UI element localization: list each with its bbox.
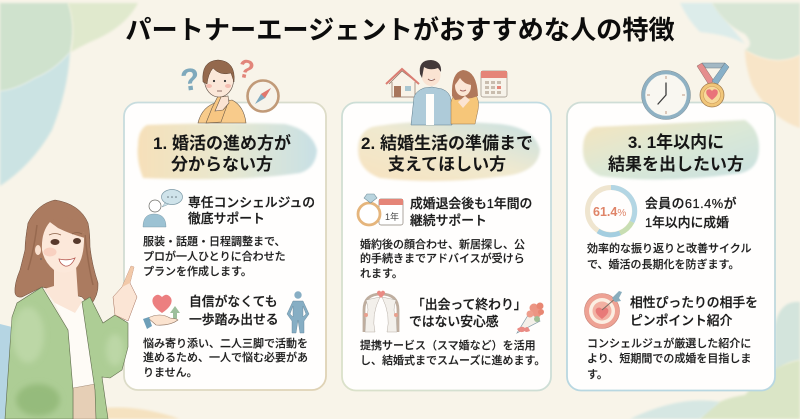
text: 一歩踏み出せる <box>189 312 279 327</box>
text: 継続サポート <box>410 213 487 228</box>
feature 1 title: 専任コンシェルジュの <box>188 195 315 210</box>
heading 3: 3. 1年以内に <box>628 133 724 152</box>
text: りません。 <box>143 367 198 379</box>
text: 結果を出したい方 <box>608 155 744 174</box>
illustration: thinking man with question marks and compass: ? <box>178 61 202 98</box>
feature 6 title: 相性ぴったりの相手を <box>630 295 758 310</box>
feature 3 body: 婚約後の顔合わせ、新居探し、公 <box>360 239 525 251</box>
text: 進めるため、一人で悩む必要があ <box>143 352 308 364</box>
title: パートナーエージェントがおすすめな人の特徴 <box>125 15 675 45</box>
text: より、短期間での成婚を目指しま <box>587 353 751 365</box>
text: 的手続きまでアドバイスが受けら <box>360 253 525 265</box>
text: ではない安心感 <box>409 314 499 329</box>
feature 6 body: コンシェルジュが厳選した紹介に <box>587 338 751 350</box>
feature 4 body: 提携サービス（スマ婚など）を活用 <box>360 340 536 352</box>
illustration: woman in green cardigan pointing <box>4 200 138 419</box>
chart: donut 61.4%: 61.4% <box>593 205 626 219</box>
text: れます。 <box>360 268 403 280</box>
text: プロが一人ひとりに合わせた <box>143 251 286 263</box>
heading 2: 2. 結婚生活の準備まで <box>361 134 533 153</box>
text: し、結婚式までスムーズに進めます。 <box>360 355 545 367</box>
heading 1: 1. 婚活の進め方が <box>153 134 291 153</box>
text: ピンポイント紹介 <box>630 313 732 328</box>
feature 5 body: 効率的な振り返りと改善サイクル <box>587 243 751 255</box>
feature 3 title: 成婚退会後も1年間の <box>410 196 532 211</box>
text: プランを作成します。 <box>143 266 252 278</box>
illustration: thinking man with question marks and compass: ? <box>235 53 257 85</box>
text: す。 <box>587 369 608 381</box>
feature 2 body: 悩み寄り添い、二人三脚で活動を <box>143 338 308 350</box>
text: で、婚活の長期化を防ぎます。 <box>587 259 739 271</box>
feature 4 title: 「出会って終わり」 <box>412 297 527 312</box>
text: 支えてほしい方 <box>388 155 506 174</box>
icon: ring and 1-year calendar: 1年 <box>385 211 399 222</box>
feature 5 title: 会員の61.4%が <box>645 196 737 211</box>
text: 徹底サポート <box>188 211 265 226</box>
text: 分からない方 <box>171 155 273 174</box>
feature 1 body: 服装・話題・日程調整まで、 <box>143 236 286 248</box>
feature 2 title: 自信がなくても <box>189 294 278 309</box>
text: 1年以内に成婚 <box>645 215 729 230</box>
